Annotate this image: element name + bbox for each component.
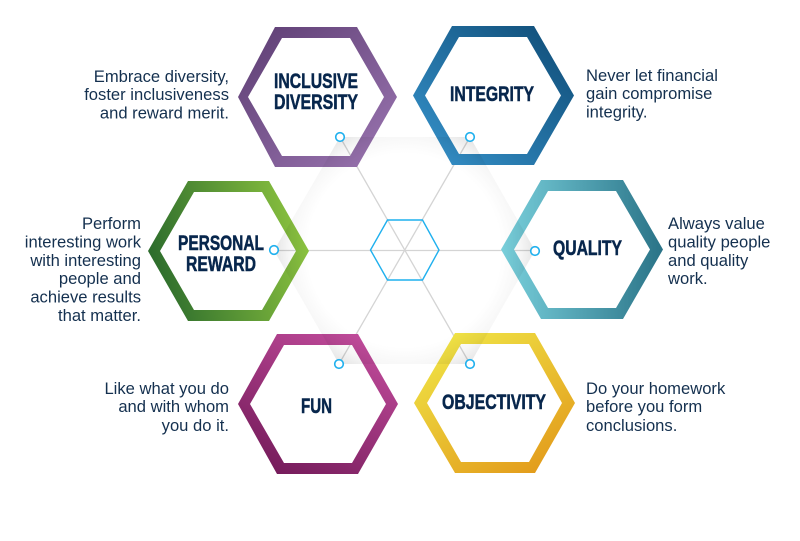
text: fun description: you do it. (162, 416, 229, 435)
connector nodes (270, 133, 539, 368)
text: quality description (667, 214, 770, 288)
text: quality description: Always value (668, 214, 765, 233)
hexagon ring: inclusive diversity (238, 27, 397, 167)
panel: inclusive diversity (84, 27, 397, 167)
panel: objectivity (414, 333, 726, 473)
text: objectivity description: conclusions. (586, 416, 677, 435)
text: personal reward description: that matter. (58, 306, 141, 325)
text: integrity description (586, 66, 718, 122)
connector lines (274, 137, 535, 364)
text: personal reward description (25, 214, 142, 325)
heading: inclusive diversity: DIVERSITY (274, 90, 358, 114)
heading: personal reward (178, 231, 264, 276)
heading: inclusive diversity: INCLUSIVE (274, 69, 358, 93)
text: integrity description: Never let financial (586, 66, 718, 85)
text: fun description: Like what you do (104, 379, 229, 398)
heading: quality: QUALITY (553, 236, 622, 260)
heading: inclusive diversity (274, 69, 358, 114)
text: inclusive diversity description: Embrace diversity, (94, 67, 229, 86)
text: personal reward description: people and (59, 269, 141, 288)
heading: objectivity: OBJECTIVITY (442, 390, 546, 414)
text: personal reward description: Perform (82, 214, 141, 233)
text: quality description: work. (667, 269, 708, 288)
text: integrity description: gain compromise (586, 84, 712, 103)
text: quality description: and quality (668, 251, 749, 270)
panel: fun (104, 334, 398, 474)
text: fun description: and with whom (118, 397, 229, 416)
text: integrity description: integrity. (586, 102, 647, 122)
text: inclusive diversity description: foster inclusiveness (84, 85, 229, 104)
text: personal reward description: achieve results (30, 288, 141, 306)
central hexagon (370, 220, 439, 280)
text: objectivity description: before you form (586, 397, 702, 416)
panel: integrity (413, 26, 718, 165)
panel: personal reward (25, 181, 309, 325)
hexagon ring: quality (501, 180, 663, 319)
hexagon ring: objectivity (414, 333, 575, 473)
heading: personal reward: PERSONAL (178, 231, 264, 255)
heading: integrity: INTEGRITY (450, 82, 534, 106)
text: objectivity description (586, 379, 726, 435)
text: quality description: quality people (668, 232, 770, 252)
text: personal reward description: with interesting (29, 251, 141, 270)
hexagon ring: fun (238, 334, 398, 474)
hexagon ring: integrity (413, 26, 574, 165)
text: inclusive diversity description (84, 67, 229, 122)
text: fun description (104, 379, 229, 435)
text: inclusive diversity description: and reward merit. (100, 104, 229, 122)
text: objectivity description: Do your homework (586, 379, 726, 398)
hexagon ring: personal reward (148, 181, 309, 321)
heading: fun: FUN (301, 394, 332, 418)
heading: personal reward: REWARD (186, 252, 256, 276)
text: personal reward description: interesting work (25, 232, 142, 252)
background hexagon (274, 137, 535, 364)
panel: quality (501, 180, 770, 319)
